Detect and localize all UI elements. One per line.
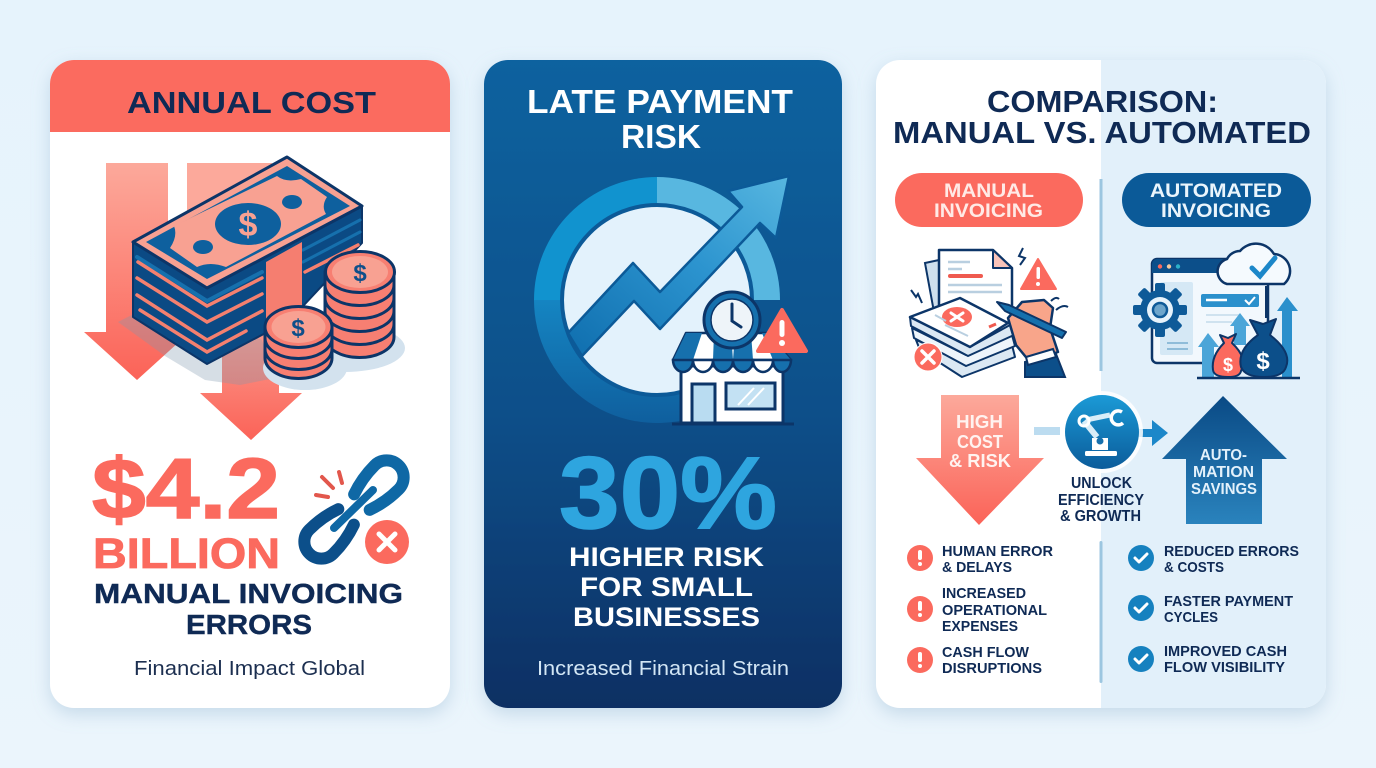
- panel: late payment risk: [484, 60, 842, 708]
- icon: automated dashboard with savings: $: [1256, 348, 1270, 375]
- arrow: high cost and risk: COST: [957, 432, 1003, 452]
- icon: falling money stack with arrows: $: [291, 315, 305, 342]
- icon: falling money stack with arrows: [84, 157, 405, 440]
- bill stack sides: [133, 206, 362, 364]
- arrow: high cost and risk: HIGH: [956, 412, 1003, 432]
- arrow: automation savings: AUTO-: [1200, 447, 1247, 464]
- item: faster payment: FASTER PAYMENT: [1164, 593, 1293, 610]
- text: unlock efficiency and growth: & GROWTH: [1060, 508, 1141, 525]
- right coin stack: [325, 272, 394, 358]
- stat: $4.2 billion: BILLION: [93, 530, 280, 578]
- text: higher risk for small businesses: HIGHER RISK: [569, 542, 765, 572]
- text: unlock efficiency and growth: EFFICIENCY: [1058, 492, 1144, 509]
- heading: late payment risk: [527, 83, 793, 155]
- icon: broken chain link: [297, 453, 411, 566]
- heading: late payment risk: LATE PAYMENT: [527, 83, 793, 120]
- front arrow piece: [266, 242, 302, 330]
- item: increased expenses: EXPENSES: [942, 618, 1018, 635]
- heading: manual invoicing errors: MANUAL INVOICING: [94, 578, 403, 609]
- icon: automated dashboard with savings: $: [1223, 355, 1233, 375]
- text: higher risk for small businesses: [569, 542, 765, 632]
- item: increased expenses: [907, 585, 1047, 635]
- item: human error: HUMAN ERROR: [942, 543, 1053, 560]
- pill: automated invoicing: AUTOMATED: [1150, 181, 1282, 202]
- list: manual drawbacks: [907, 543, 1053, 677]
- panel header: annual cost: [50, 60, 450, 132]
- heading: comparison: [893, 84, 1311, 150]
- caption: financial impact: Financial Impact Global: [134, 658, 365, 680]
- heading: manual invoicing errors: [94, 578, 403, 640]
- heading: comparison: COMPARISON:: [987, 84, 1218, 119]
- item: improved cash flow: FLOW VISIBILITY: [1164, 659, 1285, 676]
- icon: risk ring with rising arrow: [534, 176, 789, 423]
- stat: 30%: 30%: [559, 436, 777, 550]
- heading: comparison: MANUAL VS. AUTOMATED: [893, 115, 1311, 150]
- pill: automated invoicing: [1122, 173, 1311, 227]
- left coin stack: [265, 327, 332, 378]
- text: unlock efficiency and growth: [1058, 475, 1144, 525]
- arrow: automation savings: SAVINGS: [1191, 481, 1257, 498]
- item: reduced errors: [1128, 543, 1299, 576]
- stat: $4.2 billion: [92, 442, 280, 578]
- panel: annual cost: [50, 60, 450, 708]
- icon: storefront with clock and alert: [672, 292, 806, 424]
- pill: manual invoicing: INVOICING: [934, 201, 1043, 222]
- arrow: high cost and risk: & RISK: [949, 451, 1011, 471]
- item: increased expenses: INCREASED: [942, 585, 1026, 602]
- item: improved cash flow: IMPROVED CASH: [1164, 643, 1287, 660]
- icon: falling money stack with arrows: $: [239, 206, 258, 244]
- item: cash flow disruptions: [907, 644, 1042, 677]
- text: higher risk for small businesses: FOR SMALL: [580, 572, 753, 602]
- item: cash flow disruptions: CASH FLOW: [942, 644, 1030, 661]
- arrow: high cost and risk: [916, 395, 1044, 525]
- heading: manual invoicing errors: ERRORS: [186, 609, 312, 640]
- icon: automated dashboard with savings: [1133, 244, 1300, 378]
- item: improved cash flow: [1128, 643, 1287, 676]
- pill: manual invoicing: MANUAL: [944, 181, 1034, 202]
- panel header: annual cost: ANNUAL COST: [127, 85, 376, 120]
- item: reduced errors: REDUCED ERRORS: [1164, 543, 1299, 560]
- icon: falling money stack with arrows: $: [353, 260, 367, 287]
- item: increased expenses: OPERATIONAL: [942, 602, 1047, 619]
- text: higher risk for small businesses: BUSINESSES: [573, 602, 760, 632]
- pill: manual invoicing: [895, 173, 1083, 227]
- item: reduced errors: & COSTS: [1164, 559, 1224, 576]
- bill top: [133, 157, 362, 288]
- caption: increased financial strain: Increased Financial Strain: [537, 658, 789, 680]
- list: automation benefits: [1128, 543, 1299, 676]
- icon: automation robot arm connector: [1034, 391, 1168, 473]
- item: faster payment: CYCLES: [1164, 609, 1218, 626]
- pill: automated invoicing: INVOICING: [1161, 201, 1271, 222]
- arrow: automation savings: [1162, 396, 1287, 524]
- heading: late payment risk: RISK: [621, 118, 701, 155]
- text: unlock efficiency and growth: UNLOCK: [1071, 475, 1132, 492]
- item: human error: [907, 543, 1053, 576]
- arrow: automation savings: MATION: [1193, 464, 1254, 481]
- item: faster payment: [1128, 593, 1293, 626]
- stat: $4.2 billion: $4.2: [92, 442, 280, 537]
- item: cash flow disruptions: DISRUPTIONS: [942, 660, 1042, 677]
- item: human error: & DELAYS: [942, 559, 1012, 576]
- panel: comparison: [876, 60, 1326, 708]
- icon: manual paperwork with errors: [910, 248, 1068, 377]
